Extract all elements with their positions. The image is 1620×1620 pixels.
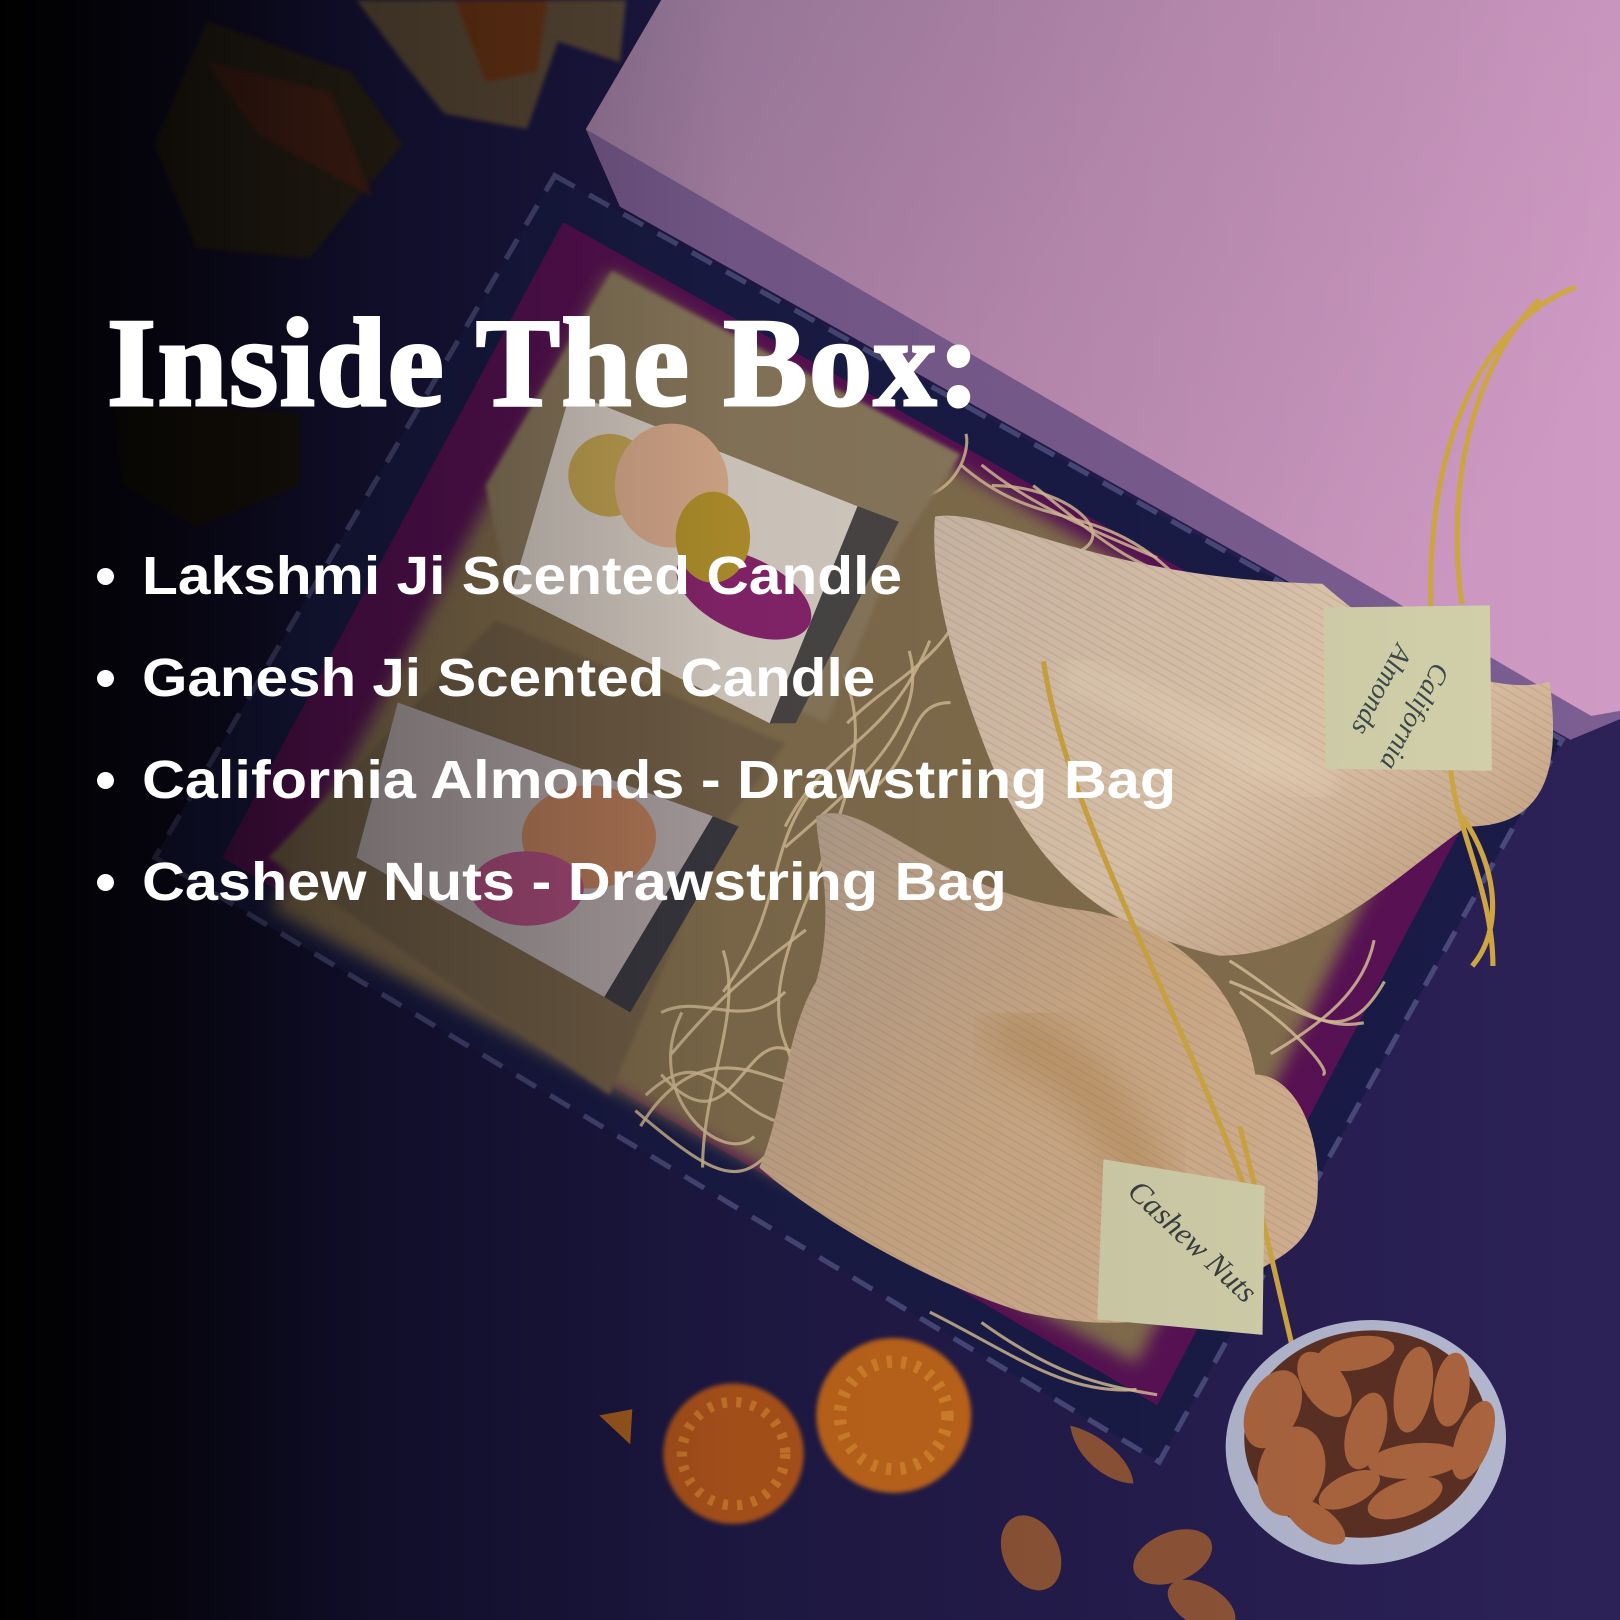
open gift box [155, 176, 1562, 1462]
marigold flowers [599, 1338, 971, 1524]
tag: California Almonds: California [1373, 658, 1455, 775]
list item 3: California Almonds - Drawstring Bag [142, 750, 1176, 810]
drawstring bag: California Almonds [934, 516, 1553, 956]
bullet list [97, 546, 1176, 912]
candle: Lakshmi (bottom) [269, 620, 785, 1095]
tag: California Almonds: Almonds [1345, 638, 1419, 740]
list item 1: Lakshmi Ji Scented Candle [142, 546, 902, 606]
decoration: paper fans top-left [114, 0, 626, 527]
pink box lid [586, 0, 1620, 740]
yellow drawstrings [1043, 287, 1576, 1343]
title: Inside The Box: [107, 294, 981, 433]
candle: Ganesh (top) [486, 271, 961, 723]
tag: California Almonds [1323, 605, 1492, 775]
tag: Cashew Nuts [1097, 1159, 1265, 1335]
list item 2: Ganesh Ji Scented Candle [142, 648, 875, 708]
drawstring bag: Cashew Nuts [759, 813, 1318, 1323]
bowl of almonds [1210, 1302, 1522, 1583]
loose almonds [989, 1426, 1244, 1620]
list item 4: Cashew Nuts - Drawstring Bag [142, 852, 1007, 912]
tag: Cashew Nuts: Cashew Nuts [1121, 1173, 1264, 1309]
straw filling [635, 434, 1384, 1395]
